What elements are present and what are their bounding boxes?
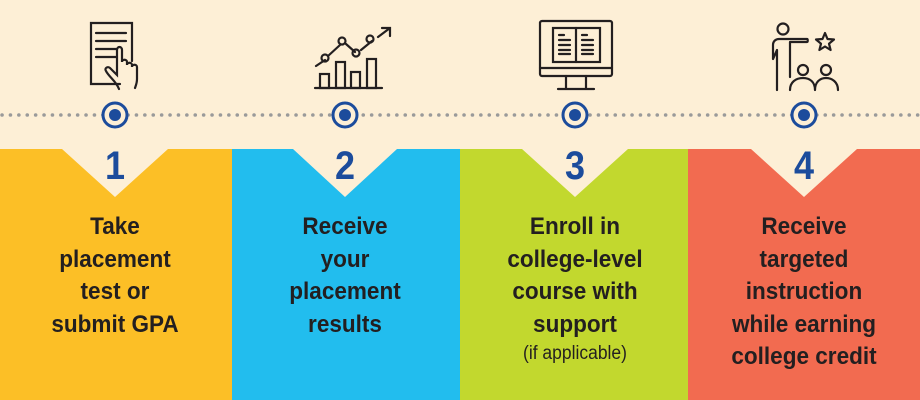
text: step 4 (731, 213, 877, 370)
text: step 4: college credit (731, 343, 877, 370)
icon: teacher with students (773, 24, 838, 90)
text: step 1: Take (90, 213, 140, 240)
number 1: 1 (105, 144, 125, 188)
panel: step 3 (460, 149, 688, 400)
text: step 1 (51, 213, 179, 338)
icon: growth chart (315, 28, 390, 88)
text: step 2: your (321, 246, 369, 272)
panel: step 4 (688, 149, 920, 400)
number 3: 3 (565, 144, 585, 188)
text: step 3: Enroll in (530, 213, 620, 240)
text: step 1: submit GPA (51, 310, 179, 338)
icon: computer with book (540, 21, 612, 89)
icon: document with hand (91, 23, 137, 89)
text: step 4: while earning (732, 310, 876, 338)
text: step 1: test or (81, 278, 149, 305)
text: step 4: Receive (761, 213, 847, 240)
text: step 3 (507, 213, 643, 364)
text: step 2: Receive (302, 213, 388, 240)
text: step 2 (289, 213, 401, 338)
text: step 2: results (308, 310, 382, 338)
number 4: 4 (794, 144, 814, 188)
text: step 4: instruction (746, 278, 862, 305)
text: step 3: college-level (507, 246, 643, 272)
timeline with icons and markers (0, 20, 920, 128)
text: step 3: course with (512, 278, 638, 305)
panel: step 1 (0, 149, 232, 400)
text: step 1: placement (59, 246, 171, 272)
text: step 3: support (533, 310, 617, 338)
text: step 4: targeted (760, 246, 848, 272)
number 2: 2 (335, 144, 355, 188)
text: step 3: (if applicable) (523, 343, 627, 364)
panel: step 2 (232, 149, 460, 400)
text: step 2: placement (289, 278, 401, 305)
